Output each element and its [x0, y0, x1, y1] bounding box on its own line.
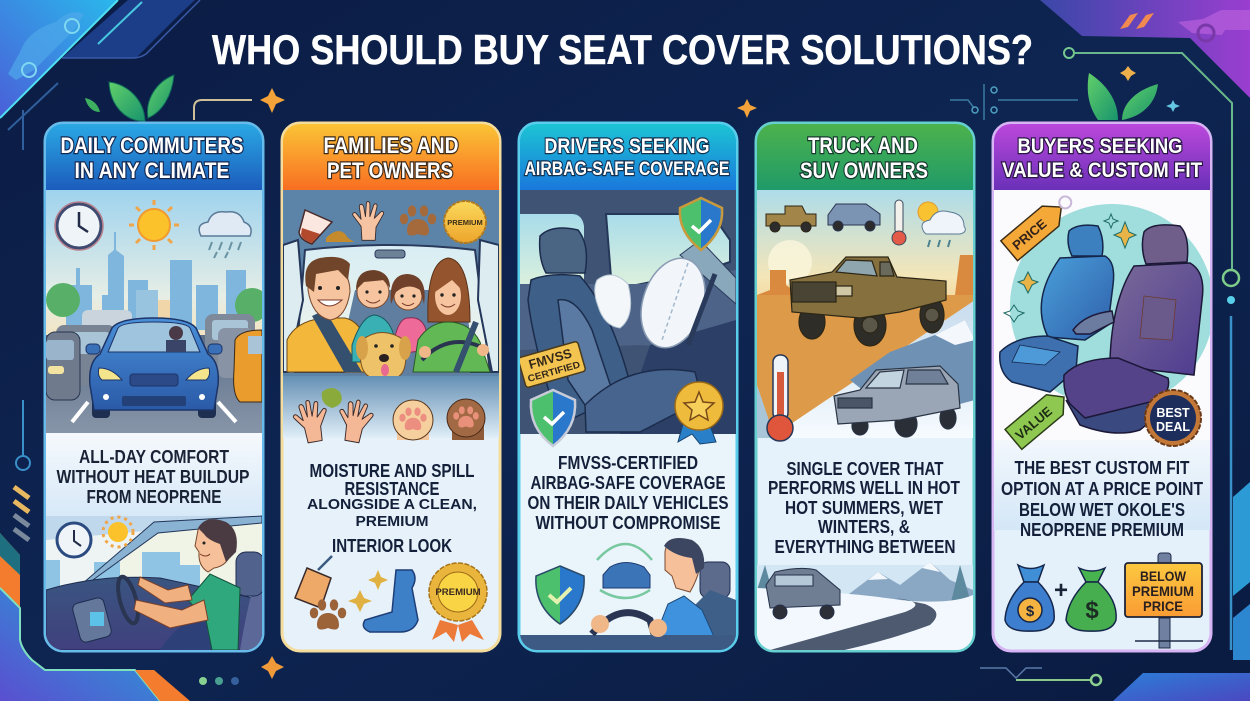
- sign: below premium price: [1125, 553, 1203, 648]
- scene: seats: [994, 189, 1214, 449]
- heading: value: BUYERS SEEKING: [1018, 135, 1182, 158]
- heading: truck: [800, 133, 928, 183]
- text: commuters body: [56, 450, 249, 503]
- text: airbag body: AIRBAG-SAFE COVERAGE: [530, 472, 726, 493]
- icon: shield bottom: [536, 566, 584, 624]
- icon: blue money bag: [1005, 565, 1054, 631]
- text: airbag body: FMVSS-CERTIFIED: [558, 452, 698, 473]
- text: value body: THE BEST CUSTOM FIT: [1014, 457, 1190, 478]
- decoration: bottom-right corner: [980, 482, 1250, 701]
- icon row: cup, paw, seat, medal: PREMIUM: [435, 587, 481, 598]
- icon: blue seat: [1000, 225, 1114, 392]
- text: airbag body: [528, 456, 728, 529]
- heading: truck: TRUCK AND: [808, 133, 918, 158]
- father: [287, 257, 366, 372]
- panel: families and pets: [282, 123, 500, 651]
- sign: below premium price: BELOW: [1140, 568, 1187, 584]
- icon: star blue right: [1166, 100, 1180, 112]
- panel: value and custom fit: [993, 123, 1214, 651]
- driver man: [134, 519, 264, 650]
- icon: purple seat: [1064, 225, 1203, 433]
- panel: airbag safe: [518, 123, 737, 652]
- text: families body: MOISTURE AND SPILL: [310, 461, 474, 481]
- icon: shield top: [680, 198, 722, 250]
- tag: fmvss: FMVSS: [527, 345, 574, 372]
- text: families body: PREMIUM: [356, 513, 428, 530]
- text: truck body: EVERYTHING BETWEEN: [774, 536, 956, 557]
- text: families body: INTERIOR LOOK: [332, 536, 452, 556]
- heading: airbag: [524, 135, 730, 180]
- plus sign: +: [1054, 577, 1068, 604]
- icon: thermometer small: [892, 200, 906, 245]
- icon: check top: [692, 220, 711, 232]
- large airbag: [640, 258, 706, 348]
- icon: rain cloud: [199, 212, 251, 258]
- icon: green money bag: [1066, 568, 1116, 631]
- sign: below premium price: PREMIUM: [1132, 583, 1194, 599]
- scene: car interior with airbags: [518, 190, 736, 446]
- truck: [790, 257, 946, 346]
- header band: [520, 124, 736, 190]
- driver: [520, 538, 736, 652]
- suv: [834, 366, 960, 437]
- text: truck body: [768, 458, 961, 557]
- header band: [994, 124, 1210, 190]
- heading: value: [1002, 135, 1202, 182]
- heading: truck: SUV OWNERS: [800, 158, 928, 183]
- header band: [283, 124, 499, 190]
- header band: [46, 124, 262, 190]
- heading: commuters: DAILY COMMUTERS: [60, 133, 244, 158]
- heading: value: VALUE & CUSTOM FIT: [1002, 159, 1202, 182]
- icon: star gold right: [1120, 66, 1136, 81]
- icon: green money bag: $: [1085, 597, 1099, 624]
- tag: fmvss: [518, 341, 586, 388]
- text: airbag body: ON THEIR DAILY VEHICLES: [528, 492, 728, 513]
- text: airbag body: WITHOUT COMPROMISE: [536, 512, 720, 533]
- text: value body: BELOW WET OKOLE'S: [1019, 499, 1185, 520]
- icon: blue money bag: $: [1026, 603, 1035, 620]
- scene: city traffic: [46, 190, 269, 433]
- tag: value: VALUE: [1012, 403, 1055, 443]
- tag: fmvss: CERTIFIED: [527, 359, 582, 385]
- grey suv: [766, 568, 840, 619]
- icon: sun and cloud: [918, 202, 965, 247]
- text: truck body: PERFORMS WELL IN HOT: [768, 477, 961, 498]
- header band: [757, 124, 973, 190]
- icon: star medal: [675, 382, 723, 444]
- badge: best deal: DEAL: [1156, 420, 1190, 434]
- text: commuters body: ALL-DAY COMFORT: [79, 446, 230, 467]
- icon: shield low: [531, 390, 575, 446]
- text: families body: RESISTANCE: [344, 479, 440, 499]
- icon: small sun: [103, 517, 133, 547]
- icon row: spill, hand, paw, badge: [299, 201, 486, 244]
- panel: daily commuters: [45, 123, 269, 651]
- badge: best deal: BEST: [1156, 406, 1190, 420]
- icon row: spill, hand, paw, badge: PREMIUM: [447, 218, 483, 227]
- sign: below premium price: PRICE: [1143, 598, 1183, 614]
- text: commuters body: FROM NEOPRENE: [86, 486, 222, 507]
- heading: families: [324, 133, 458, 183]
- tag: value: [1005, 387, 1072, 449]
- text: truck body: WINTERS, &: [818, 516, 910, 537]
- scene: desert and snow: [757, 190, 975, 438]
- text: commuters body: WITHOUT HEAT BUILDUP: [56, 466, 250, 487]
- heading: commuters: [60, 133, 244, 183]
- tag: price: [1001, 189, 1079, 261]
- text: families body: [307, 461, 477, 556]
- heading: airbag: AIRBAG-SAFE COVERAGE: [524, 159, 730, 180]
- seat: [528, 228, 702, 432]
- panel: truck and suv: [756, 123, 975, 651]
- text: value body: [1001, 457, 1204, 540]
- text background: [46, 433, 262, 523]
- icon: car with arrows: [597, 544, 652, 598]
- sparkles: [1004, 214, 1136, 322]
- text: value body: NEOPRENE PREMIUM: [1020, 519, 1184, 540]
- icon: thermometer big: [767, 355, 793, 441]
- icon row: cup, paw, seat, medal: [295, 556, 487, 642]
- decorative connector: [194, 100, 252, 120]
- decoration: top-right corner: [950, 0, 1250, 650]
- icon: star centre: [737, 99, 757, 118]
- badge: best deal: [1145, 390, 1201, 446]
- icon: star left top: [260, 88, 285, 113]
- scene: winter road: [757, 562, 973, 651]
- decoration: bottom-left corner: [0, 400, 239, 701]
- icon row: hands and paws: [283, 376, 499, 445]
- icon: small clock: [57, 523, 91, 557]
- children: [352, 270, 426, 362]
- text: truck body: SINGLE COVER THAT: [786, 458, 944, 479]
- icon: clock: [55, 202, 103, 250]
- icon: leaves left: [85, 75, 174, 121]
- main blue car: [86, 318, 222, 418]
- decoration: top-left corner: [0, 0, 200, 150]
- icon: leaves right: [1088, 73, 1158, 120]
- icon: small truck: [766, 206, 816, 232]
- small airbag: [595, 275, 631, 328]
- text: value body: OPTION AT A PRICE POINT: [1001, 478, 1204, 499]
- text background: [994, 430, 1210, 530]
- title: WHO SHOULD BUY SEAT COVER SOLUTIONS?: [212, 26, 1033, 73]
- dog: [356, 332, 411, 378]
- text: truck body: HOT SUMMERS, WET: [785, 497, 944, 518]
- heading: airbag: DRIVERS SEEKING: [544, 135, 710, 158]
- scene: driver in car: [46, 516, 264, 650]
- tag: price: PRICE: [1009, 216, 1050, 253]
- icon: small suv: [828, 204, 880, 231]
- heading: commuters: IN ANY CLIMATE: [74, 158, 230, 183]
- icon: star bottom: [261, 656, 284, 679]
- text: families body: ALONGSIDE A CLEAN,: [307, 496, 477, 513]
- heading: families: FAMILIES AND: [324, 133, 458, 158]
- icon: sun: [129, 200, 179, 250]
- mother: [413, 258, 490, 372]
- heading: families: PET OWNERS: [327, 158, 453, 183]
- scene: family in car: [283, 190, 499, 378]
